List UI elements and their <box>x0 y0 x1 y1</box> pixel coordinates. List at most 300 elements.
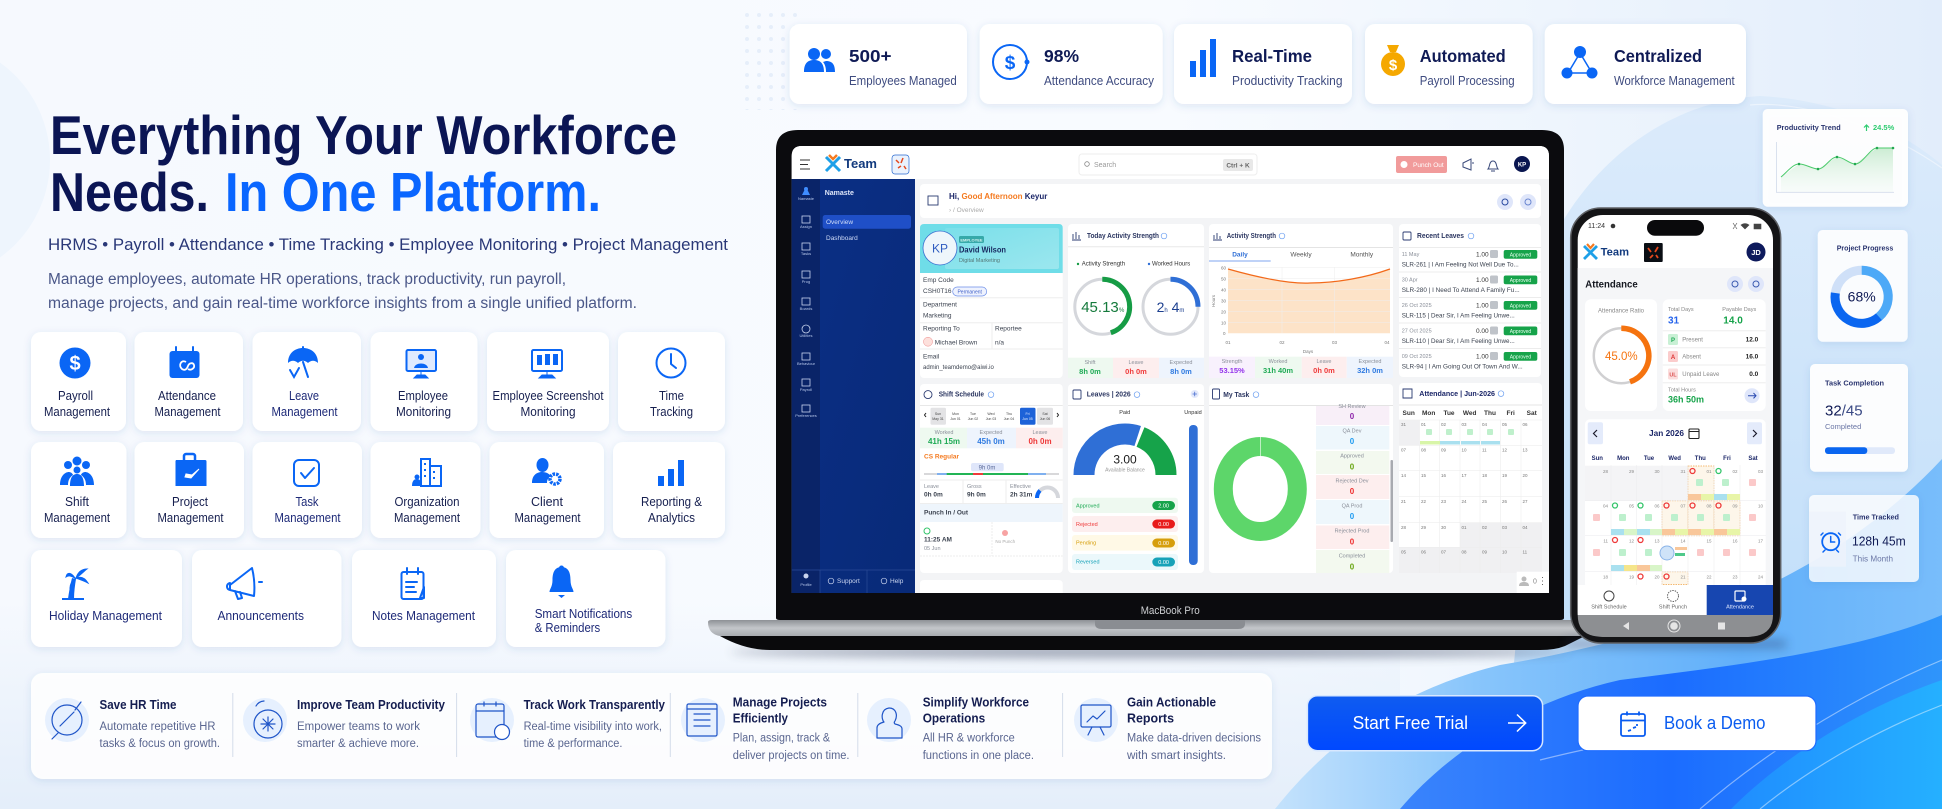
sidebar: Dashboard <box>826 235 858 242</box>
sidebar: Profile <box>800 582 812 587</box>
recent leaves card: Recent Leaves <box>1417 231 1464 240</box>
phone bottom navigation: Shift Schedule <box>1591 605 1627 611</box>
attendance summary card <box>1663 299 1766 411</box>
activity strength chart card: 20 <box>1221 310 1227 314</box>
attendance calendar card: 12 <box>1502 448 1508 452</box>
phone calendar: 20 <box>1654 574 1660 580</box>
attendance summary card: Total Days <box>1668 307 1694 313</box>
feature card: Time Tracking <box>618 332 725 431</box>
phone calendar: Wed <box>1668 456 1681 462</box>
attendance calendar card: 29 <box>1421 525 1427 530</box>
today activity strength card: Today Activity Strength <box>1087 231 1159 240</box>
phone app header: JD <box>1751 248 1761 257</box>
feature card: Holiday Management <box>31 550 182 647</box>
greeting header: › / Overview <box>949 207 984 214</box>
title: Needs. <box>50 161 209 223</box>
today activity strength card: Expected <box>1170 360 1192 366</box>
benefit: Save HR Time: tasks & focus on growth. <box>100 738 220 750</box>
benefit: Manage Projects Efficiently: Efficiently <box>733 712 788 726</box>
phone calendar: 31 <box>1680 469 1686 474</box>
attendance summary card: P <box>1671 338 1675 344</box>
phone calendar: Jan 2026 <box>1649 429 1685 438</box>
phone calendar: 23 <box>1732 574 1738 580</box>
recent leaves card: SLR-261 | I Am Feeling Not Well Due To... <box>1402 262 1519 269</box>
feature card: Organization Management: Organization <box>394 495 460 509</box>
phone calendar: 15 <box>1706 538 1712 544</box>
benefit: Simplify Workforce Operations <box>867 696 1034 762</box>
online users widget: 0 <box>1533 578 1537 586</box>
employee profile card: Emp Code <box>923 277 954 284</box>
feature card: Time Tracking: Time <box>659 389 684 403</box>
attendance calendar card: 08 <box>1462 550 1467 554</box>
attendance calendar card: 21 <box>1401 499 1407 504</box>
attendance calendar card: 17 <box>1462 473 1467 478</box>
feature card: Shift Management: Management <box>44 511 110 525</box>
today activity strength card: 45.13 <box>1081 299 1119 316</box>
employee profile card: Digital Marketing <box>959 258 1000 264</box>
attendance calendar card: 05 <box>1401 550 1407 554</box>
phone calendar: Mon <box>1617 456 1630 462</box>
recent leaves card: 26 Oct 2025 <box>1402 303 1432 309</box>
benefits panel <box>31 673 1272 779</box>
leaves gauge card: 0.00 <box>1158 522 1169 528</box>
feature card: Attendance Management: Management <box>154 405 221 419</box>
feature card: Reporting & Analytics: Reporting & <box>641 495 703 509</box>
stat card: 98% Attendance Accuracy: $ <box>1005 53 1016 74</box>
benefit: Manage Projects Efficiently: deliver projects on time. <box>733 750 850 762</box>
phone calendar: Tue <box>1644 456 1655 462</box>
activity strength chart card: 0 <box>1223 331 1226 336</box>
benefit: Simplify Workforce Operations: All HR & workforce <box>923 733 1015 745</box>
activity strength chart card: Leave <box>1316 359 1332 365</box>
greeting header: Hi, Good Afternoon Keyur <box>949 192 1047 201</box>
phone app header: Team <box>1601 247 1629 259</box>
attendance summary card: Payable Days <box>1722 307 1756 313</box>
attendance calendar card: 11 <box>1522 550 1528 554</box>
attendance summary card: A <box>1671 355 1676 361</box>
employee profile card: n/a <box>995 339 1004 346</box>
shift schedule card: May 31 <box>932 417 944 421</box>
phone app header <box>1584 242 1766 262</box>
feature card: Task Management: Task <box>296 495 319 509</box>
shift schedule card: Wed <box>987 412 995 416</box>
shift schedule card: Expected <box>980 430 1002 436</box>
phone calendar: 29 <box>1629 469 1634 474</box>
stat card: 500+ Employees Managed: Employees Managed <box>849 74 957 88</box>
my task card: SH Review <box>1338 404 1366 410</box>
phone calendar: 16 <box>1732 538 1738 544</box>
feature card: Holiday Management: Holiday Management <box>49 609 163 623</box>
phone calendar: Sat <box>1748 456 1758 462</box>
stat card: Centralized Workforce Management: Centralized <box>1614 46 1702 66</box>
shift schedule card: 45h 0m <box>977 437 1005 446</box>
feature card: Payroll Management: Management <box>44 405 110 419</box>
activity strength chart card: 04 <box>1384 340 1390 345</box>
stat card: Centralized Workforce Management: Workforce Management <box>1614 74 1735 88</box>
shift schedule card: Sat <box>1042 412 1048 416</box>
activity strength chart card: Worked <box>1269 359 1287 365</box>
benefit: Gain Actionable Reports: Make data-driven decisions <box>1127 733 1261 745</box>
widget: Productivity Trend: Productivity Trend <box>1777 123 1841 132</box>
leaves gauge card: Approved <box>1076 504 1100 510</box>
leaves gauge card: 3.00 <box>1113 452 1137 466</box>
sidebar: Overview <box>826 219 853 226</box>
attendance calendar card: 15 <box>1421 473 1427 478</box>
phone calendar: Thu <box>1695 456 1706 462</box>
benefit: Gain Actionable Reports: Gain Actionable <box>1127 696 1216 710</box>
widget: Project Progress: 68% <box>1848 288 1876 304</box>
attendance calendar card: 20 <box>1522 473 1528 478</box>
attendance ratio card: Attendance Ratio <box>1598 308 1645 314</box>
feature card: Shift Management: Shift <box>65 495 90 509</box>
attendance summary card: Unpaid Leave <box>1682 372 1720 378</box>
stat card: Real-Time Productivity Tracking: Productivity Tracking <box>1232 74 1343 88</box>
employee profile card: EMPLOYEE <box>960 238 983 242</box>
sidebar: Tasks <box>801 251 811 256</box>
attendance summary card: 14.0 <box>1723 315 1743 326</box>
phone calendar: 11 <box>1603 538 1608 544</box>
shift schedule card: 11:25 AM <box>924 537 952 544</box>
leaves gauge card: Rejected <box>1076 522 1098 528</box>
my task card: Approved <box>1340 454 1364 460</box>
recent leaves card: Approved <box>1510 278 1531 284</box>
activity strength chart card: Daily <box>1232 252 1248 259</box>
today activity strength card: Shift <box>1084 360 1096 366</box>
feature card: Reporting & Analytics <box>613 442 725 538</box>
feature card: Project Management: Management <box>158 511 224 525</box>
attendance calendar card: 03 <box>1502 525 1508 530</box>
activity strength chart card: 40 <box>1221 288 1227 292</box>
recent leaves card: 09 Oct 2025 <box>1402 354 1432 360</box>
my task card <box>1209 384 1393 573</box>
my task card: 0 <box>1350 487 1355 496</box>
employee profile card: Department <box>923 302 957 309</box>
leaves gauge card: Available Balance <box>1105 468 1145 474</box>
phone calendar: 08 <box>1706 504 1712 508</box>
laptop lid <box>776 130 1564 620</box>
activity strength chart card: 53.15% <box>1219 366 1245 375</box>
feature card: Task Management <box>252 442 362 538</box>
attendance calendar card: 10 <box>1462 448 1467 452</box>
shift schedule card: Effective <box>1010 484 1031 490</box>
leaves gauge card: Leaves | 2026 <box>1087 390 1131 399</box>
benefit: Improve Team Productivity: smarter & achieve more. <box>297 738 419 750</box>
feature card: Payroll Management: Payroll <box>58 389 93 403</box>
recent leaves card: Approved <box>1510 252 1531 258</box>
sidebar: Assign <box>800 224 812 229</box>
activity strength chart card: 60 <box>1221 266 1227 270</box>
shift schedule card: Jun 06 <box>1040 417 1050 421</box>
feature card: Time Tracking: Tracking <box>650 405 693 419</box>
attendance calendar card: Thu <box>1484 410 1496 417</box>
phone content background <box>1578 268 1773 585</box>
phone calendar: 18 <box>1603 574 1608 580</box>
feature card: Leave Management <box>252 332 361 431</box>
benefit: Manage Projects Efficiently <box>681 696 850 762</box>
shift schedule card: 0h 0m <box>924 492 943 499</box>
attendance calendar card: Fri <box>1507 410 1515 417</box>
attendance calendar card: Sat <box>1527 410 1538 417</box>
stat card: Centralized Workforce Management <box>1545 24 1746 104</box>
feature card: Project Management <box>134 442 244 538</box>
recent leaves card: Approved <box>1510 354 1531 360</box>
stat card: Automated Payroll Processing: $ <box>1389 57 1398 74</box>
sidebar: Namaste <box>798 196 815 201</box>
widget: Productivity Trend <box>1763 109 1908 207</box>
shift schedule card: Jun 04 <box>1004 417 1014 421</box>
benefit: Save HR Time <box>45 698 220 750</box>
attendance summary card: 0.0 <box>1749 371 1759 378</box>
subtitle: product list: HRMS • Payroll • Attendance • Time Tracking • Employee Monitoring • Project Management <box>48 235 728 254</box>
phone calendar: 28 <box>1603 469 1608 474</box>
sidebar: Utilities <box>800 333 812 338</box>
shift schedule card: Sun <box>935 412 941 416</box>
employee profile card: Permanent <box>957 290 983 296</box>
today activity strength card: % <box>1119 308 1125 314</box>
attendance calendar card: 09 <box>1482 550 1488 554</box>
attendance calendar card: 01 <box>1462 525 1467 530</box>
attendance calendar card: 23 <box>1441 499 1447 504</box>
benefit: Improve Team Productivity: Empower teams to work <box>297 721 420 733</box>
attendance calendar card: 04 <box>1482 422 1488 427</box>
feature card: Organization Management: Management <box>394 511 460 525</box>
widget: Time Tracked <box>1809 495 1919 582</box>
stat card: Automated Payroll Processing <box>1365 24 1533 104</box>
recent leaves card <box>1399 224 1541 377</box>
attendance calendar card: Mon <box>1422 410 1435 417</box>
leaves gauge card: 0.00 <box>1158 560 1169 566</box>
sidebar: Boards <box>800 306 812 311</box>
benefit: Manage Projects Efficiently: Manage Projects <box>733 696 827 710</box>
phone calendar: 07 <box>1680 504 1686 508</box>
feature card: Notes Management: Notes Management <box>372 609 475 623</box>
my task card: QA Dev <box>1343 428 1362 434</box>
my task card: 0 <box>1350 462 1355 472</box>
my task card: 0 <box>1350 437 1355 446</box>
employee profile card: KP <box>932 242 948 256</box>
attendance summary card: Total Hours <box>1668 388 1696 394</box>
shift schedule card: No Punch <box>995 539 1016 544</box>
sidebar: Behaviour <box>797 361 816 366</box>
logo: Team <box>844 156 877 171</box>
shift schedule card: 0h 0m <box>1028 437 1052 446</box>
shift schedule card: Thu <box>1006 412 1012 416</box>
shift schedule card: 9h 0m <box>979 466 995 472</box>
attendance ratio card: 45.0% <box>1605 351 1638 363</box>
top bar <box>792 146 1549 179</box>
shift schedule card: Fri <box>1025 412 1030 416</box>
recent leaves card: 27 Oct 2025 <box>1402 328 1432 334</box>
attendance calendar card: 08 <box>1421 448 1427 452</box>
today activity strength card: 8h 0m <box>1170 367 1192 376</box>
phone calendar: 01 <box>1706 469 1712 474</box>
attendance calendar card: 03 <box>1462 422 1467 427</box>
icon: calendar <box>1621 712 1645 736</box>
phone calendar: 14 <box>1680 538 1686 544</box>
attendance calendar card: 05 <box>1502 422 1508 427</box>
feature card: Leave Management: Management <box>272 405 338 419</box>
shift schedule card: Shift Schedule <box>939 390 984 399</box>
leaves gauge card: Paid <box>1119 410 1130 416</box>
widget: Time Tracked: 128h 45m <box>1852 534 1906 549</box>
phone calendar: 13 <box>1654 538 1660 544</box>
widget: Productivity Trend: 24.5% <box>1873 123 1895 132</box>
widget: Time Tracked: This Month <box>1853 555 1893 564</box>
recent leaves card: 1.00 <box>1476 252 1489 258</box>
phone calendar: 19 <box>1629 574 1634 580</box>
phone calendar: Fri <box>1723 456 1731 462</box>
attendance summary card: 31 <box>1668 315 1680 326</box>
feature card: Employee Screenshot Monitoring: Employee Screenshot <box>492 389 604 403</box>
sidebar: Help <box>890 578 904 585</box>
stat card: Real-Time Productivity Tracking <box>1174 24 1352 104</box>
stat card: 98% Attendance Accuracy <box>980 24 1163 104</box>
feature card: Organization Management <box>370 442 480 538</box>
feature card: Client Management: Management <box>514 511 581 525</box>
activity strength chart card: Strength <box>1222 359 1242 365</box>
recent leaves card: SLR-115 | Dear Sir, I Am Feeling Unwe... <box>1402 312 1515 320</box>
attendance calendar card: 07 <box>1401 448 1407 452</box>
widget: Project Progress: Project Progress <box>1837 244 1893 253</box>
attendance calendar card <box>1399 383 1542 573</box>
greeting header <box>920 184 1541 218</box>
activity strength chart card: Activity Strength <box>1227 231 1276 240</box>
phone screen <box>1578 215 1773 637</box>
sidebar: Preferences <box>795 413 817 418</box>
feature card: Leave Management: Leave <box>289 389 319 403</box>
late-day highlights <box>1662 466 1740 585</box>
phone bottom navigation: Shift Punch <box>1659 605 1687 611</box>
attendance calendar card: 26 <box>1502 499 1508 504</box>
laptop base <box>708 620 1590 650</box>
title: Everything Your Workforce <box>50 104 677 166</box>
phone calendar: 24 <box>1758 574 1763 580</box>
attendance calendar card: 22 <box>1421 499 1427 504</box>
attendance calendar card: 24 <box>1462 499 1467 504</box>
widget: Task Completion: Task Completion <box>1825 379 1884 388</box>
recent leaves card: 11 May <box>1402 252 1420 258</box>
benefit: Track Work Transparently <box>470 698 665 750</box>
my task card: 0 <box>1350 538 1355 546</box>
phone <box>1566 208 1786 648</box>
phone calendar: 03 <box>1758 469 1763 474</box>
attendance calendar card: 10 <box>1502 550 1508 554</box>
sidebar: Payroll <box>800 387 812 392</box>
phone attendance title: Attendance <box>1585 278 1638 290</box>
benefit: Improve Team Productivity: Improve Team Productivity <box>297 698 445 712</box>
employee profile card: CSH0T16 <box>923 288 952 295</box>
activity strength chart card: 50 <box>1221 276 1227 282</box>
phone attendance title <box>1585 276 1764 292</box>
activity strength chart card: 32h 0m <box>1357 366 1383 375</box>
shift schedule card <box>920 384 1063 573</box>
phone calendar: Sun <box>1592 456 1603 462</box>
feature card: Employee Screenshot Monitoring: Monitoring <box>520 405 576 419</box>
attendance calendar card: 31 <box>1401 422 1407 427</box>
recent leaves card: SLR-280 | I Need To Attend A Family Fu... <box>1402 287 1520 294</box>
feature card: Client Management <box>490 442 604 538</box>
attendance calendar card: Attendance | Jun-2026 <box>1419 389 1495 398</box>
button: Start Free Trial: Start Free Trial <box>1353 713 1468 733</box>
today activity strength card: Worked Hours <box>1152 262 1190 268</box>
activity strength chart card: 03 <box>1332 340 1337 345</box>
shift schedule card: 9h 0m <box>967 492 986 499</box>
shift schedule card: Jun 02 <box>968 417 978 421</box>
sidebar: Namaste <box>825 190 854 197</box>
attendance calendar card: 13 <box>1522 448 1528 452</box>
employee profile card: Marketing <box>923 313 952 320</box>
employee profile card: Michael Brown <box>935 339 978 346</box>
today activity strength card: 2h 4m <box>1157 299 1184 315</box>
activity strength chart card: 10 <box>1221 320 1227 326</box>
employee profile card: Reportee <box>995 326 1022 333</box>
benefit: Simplify Workforce Operations: Simplify Workforce <box>923 696 1029 710</box>
feature card: Smart Notifications & Reminders: Smart Notifications <box>535 607 632 621</box>
status bar: 11:24 <box>1588 223 1605 230</box>
recent leaves card: Approved <box>1510 329 1531 335</box>
leaves gauge card: Unpaid <box>1184 410 1202 416</box>
shift schedule card: 05 Jun <box>924 546 941 552</box>
top bar: Ctrl + K <box>1226 162 1250 170</box>
laptop shadow <box>730 646 1570 658</box>
benefit: Gain Actionable Reports: Reports <box>1127 712 1174 726</box>
shift schedule card: Leave <box>1032 430 1048 436</box>
attendance calendar card: 19 <box>1502 473 1508 478</box>
recent leaves card: 1.00 <box>1476 277 1489 284</box>
icon: alarm clock <box>1821 533 1840 552</box>
shift schedule card: Tue <box>970 412 976 416</box>
top bar: KP <box>1518 162 1526 168</box>
feature card: Payroll Management: $ <box>69 353 81 375</box>
feature card: Announcements <box>192 550 342 647</box>
widget: Task Completion: 32/45 <box>1825 403 1863 420</box>
benefit: Simplify Workforce Operations: Operations <box>923 712 985 726</box>
phone calendar: 04 <box>1603 504 1608 508</box>
activity strength chart card: Hours <box>1211 294 1216 307</box>
stat card: 500+ Employees Managed: 500+ <box>849 46 892 66</box>
phone calendar: 06 <box>1654 504 1660 508</box>
activity strength chart card: Weekly <box>1290 252 1312 259</box>
shift schedule card: 41h 15m <box>928 437 960 446</box>
activity strength chart card <box>1209 224 1393 378</box>
shift schedule card: Jun 03 <box>986 417 996 421</box>
my task card: My Task <box>1223 390 1250 399</box>
activity strength chart card: 30 <box>1221 298 1227 304</box>
attendance summary card: 36h 50m <box>1668 395 1704 405</box>
attendance calendar card: 02 <box>1441 422 1447 427</box>
benefit: Gain Actionable Reports: with smart insights. <box>1126 750 1226 762</box>
leaves gauge card: 0.00 <box>1158 541 1169 547</box>
leaves gauge card: Pending <box>1076 540 1096 546</box>
attendance calendar card: 27 <box>1522 499 1528 504</box>
dashboard screen <box>792 146 1549 593</box>
shift schedule card: 2h 31m <box>1010 492 1033 499</box>
online users widget <box>1517 572 1549 593</box>
shift schedule card: Jun 05 <box>1022 417 1033 421</box>
activity strength chart card: 02 <box>1279 340 1285 345</box>
title <box>50 104 677 223</box>
my task card: Rejected Dev <box>1335 478 1369 484</box>
attendance summary card: 16.0 <box>1746 354 1759 361</box>
phone calendar: 10 <box>1758 504 1763 508</box>
benefit: Track Work Transparently: Real-time visibility into work, <box>524 721 662 733</box>
today activity strength card: Activity Strength <box>1082 262 1125 268</box>
recent leaves card: 0.00 <box>1476 328 1489 335</box>
stat card: Automated Payroll Processing: Automated <box>1420 46 1506 66</box>
phone calendar: 22 <box>1706 574 1712 580</box>
lower empty card <box>920 580 1063 593</box>
feature card: Announcements: Announcements <box>218 609 304 623</box>
